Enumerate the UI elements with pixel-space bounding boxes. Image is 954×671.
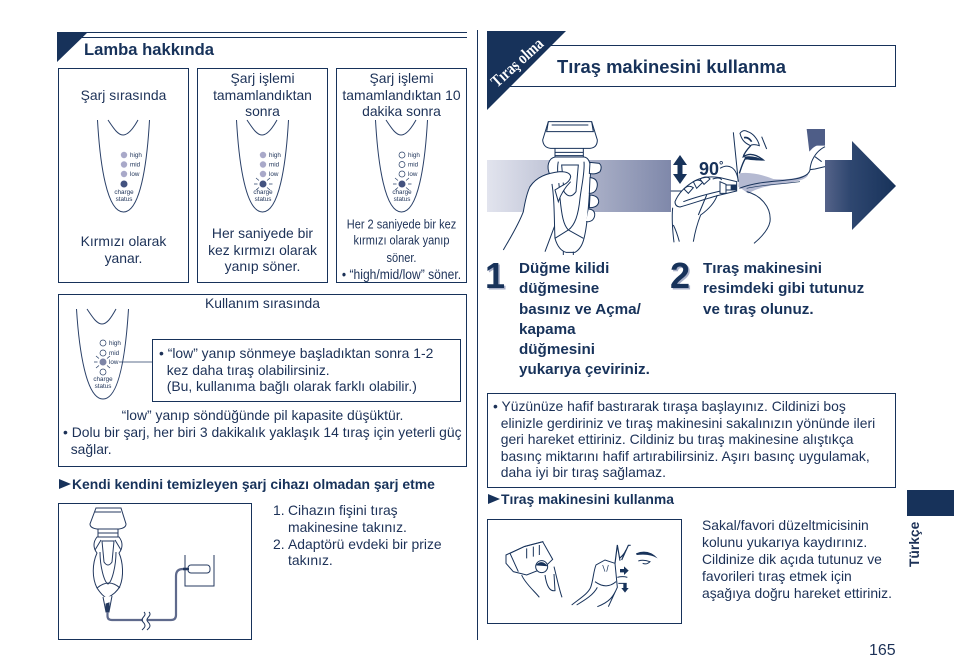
- panel: shaving tips: [487, 393, 896, 488]
- language tab: [907, 490, 954, 516]
- text: Şarj işlemi tamamlandıktan 10 dakika sonra: dakika sonra: [362, 103, 441, 119]
- illustration: shaver at 90 degrees on face: [670, 129, 826, 244]
- callout: low indicator note: [152, 339, 461, 402]
- panel: during use: [58, 294, 467, 467]
- panel: ten minutes after charging: [336, 68, 467, 283]
- icon: lamp diagram, all lit: high: [130, 152, 142, 159]
- panel: trimmer illustration: [487, 519, 682, 624]
- text: charging steps: Cihazın fişini tıraş: [288, 502, 398, 518]
- arrow: right: [825, 141, 896, 230]
- step 2 number: 2: [670, 255, 690, 296]
- text: Her saniyede bir kez: [208, 225, 317, 274]
- icon: lamp diagram, charge status blinking: low: [269, 171, 279, 178]
- text: Her 2 saniyede bir kez: söner.: [387, 251, 416, 265]
- section triangle: Tıraş olma: Tıraş olma: [487, 34, 548, 91]
- callout text: kez daha tıraş olabilirsiniz.: [167, 362, 330, 378]
- icon: lamp diagram, levels off: mid: [408, 162, 419, 168]
- text: Şarj işlemi tamamlandıktan sonra: Şarj işlemi: [230, 70, 295, 86]
- icon: lamp diagram, all lit: mid: [130, 162, 141, 168]
- icon: lamp diagram, low blinking: high: [109, 340, 121, 347]
- text: Şarj işlemi tamamlandıktan 10 dakika sonra: tamamlandıktan 10: [342, 86, 461, 102]
- page divider: [477, 30, 478, 640]
- text: Kırmızı olarak yanar: yanar.: [105, 250, 142, 266]
- tips text: basınç miktarını hafif artırabilirsiniz. Aşırı basınç uygulamak,: [501, 448, 870, 464]
- tips text: geri hareket ettiriniz. Cildiniz bu tıraş makinesine alıştıkça: [501, 431, 854, 447]
- icon: lamp diagram, charge status blinking: high: [269, 152, 281, 159]
- text: Her saniyede bir kez: yanıp söner.: [225, 258, 300, 274]
- text: Her saniyede bir kez: kez kırmızı olarak: [208, 242, 317, 258]
- text: full charge note: • Dolu bir şarj, her biri 3 dakikalık yaklaşık 14 tıraş için yeterli güç: [63, 424, 462, 440]
- text: trimmer instructions: favorileri tıraş etmek için: [702, 568, 852, 584]
- icon: lamp diagram, low blinking: status: [95, 383, 111, 390]
- text: Her 2 saniyede bir kez: kırmızı olarak yanıp: [354, 235, 449, 249]
- text: trimmer instructions: Cildinize dik açıda tutunuz ve: [702, 551, 882, 567]
- step 1 text: kapama: [519, 321, 576, 338]
- icon: lamp diagram, levels off: charge: [392, 189, 412, 196]
- step 2 text: [703, 260, 864, 318]
- icon: lamp diagram, charge status blinking: [236, 120, 289, 212]
- text: Şarj işlemi tamamlandıktan sonra: sonra: [245, 103, 280, 119]
- icon: lamp diagram, all lit: charge: [114, 189, 134, 196]
- text: charging steps: Adaptörü evdeki bir prize: [288, 536, 442, 552]
- illustration: shaver and adaptor: [90, 508, 214, 630]
- text: full charge note: [63, 424, 462, 457]
- section triangle: Tıraş olma: [487, 31, 566, 110]
- text: Her 2 saniyede bir kez: Her 2 saniyede bir kez: [347, 218, 456, 232]
- panel: after charging: [197, 68, 328, 283]
- callout text: • “low” yanıp sönmeye başladıktan sonra 1-2: [159, 345, 433, 361]
- tips text: [493, 398, 875, 480]
- callout text: (Bu, kullanıma bağlı olarak farklı olabilir.): [167, 378, 417, 394]
- header box: Tıraş makinesini kullanma: [500, 45, 896, 87]
- step 1 text: basınız ve Açma/: [519, 301, 641, 318]
- heading: Lamba hakkında: Lamba hakkında: [84, 40, 214, 59]
- icon: lamp diagram, charge status blinking: charge: [253, 189, 273, 196]
- page number: 165: [869, 642, 896, 659]
- text: full charge note: sağlar.: [71, 440, 112, 456]
- heading text: Tıraş makinesini kullanma: [557, 56, 786, 77]
- gradient band: [487, 160, 671, 212]
- icon: lamp diagram, all lit: status: [116, 196, 132, 203]
- text: Her 2 saniyede bir kez: [342, 218, 461, 283]
- text: Şarj sırasında: Şarj sırasında: [81, 87, 166, 103]
- icon: lamp diagram, low blinking: [76, 308, 152, 400]
- icon: lamp diagram, charge status blinking: mid: [269, 162, 280, 168]
- icon: lamp diagram, levels off: low: [408, 171, 418, 178]
- subheading: Tıraş makinesini kullanma: Tıraş makinesini kullanma: [501, 491, 674, 507]
- text: trimmer instructions: aşağıya doğru hareket ettiriniz.: [702, 585, 892, 601]
- text: Her saniyede bir kez: Her saniyede bir: [212, 225, 313, 241]
- text: charging steps: 2.: [273, 536, 285, 552]
- step 1 text: [519, 260, 650, 378]
- label: Türkçe: Türkçe: [907, 521, 922, 567]
- tips text: elinizle gerdiriniz ve tıraş makinesini sakalınızın yönünde ileri: [501, 414, 875, 430]
- tips text: • Yüzünüze hafif bastırarak tıraşa başlayınız. Cildinizi boş: [493, 398, 846, 414]
- text: charging steps: makinesine takınız.: [288, 519, 407, 535]
- callout text: [159, 345, 433, 394]
- text: Kırmızı olarak yanar: [81, 233, 166, 266]
- icon: lamp diagram, low blinking: mid: [109, 350, 120, 357]
- text: Şarj işlemi tamamlandıktan sonra: [213, 70, 312, 119]
- text: Kullanım sırasında: Kullanım sırasında: [205, 295, 320, 311]
- step 1 number: 1: [485, 255, 505, 296]
- icon: lamp diagram, all lit: [97, 120, 150, 212]
- icon: lamp diagram, charge status blinking: status: [255, 196, 271, 203]
- text: charging steps: 1.: [273, 502, 285, 518]
- text: low capacity note: “low” yanıp söndüğünde pil kapasite düşüktür.: [122, 407, 403, 423]
- text: trimmer instructions: [702, 517, 892, 601]
- text: Şarj işlemi tamamlandıktan sonra: tamamlandıktan: [213, 86, 312, 102]
- step 2 text: Tıraş makinesini: [703, 260, 822, 277]
- step 1 text: Düğme kilidi: [519, 260, 609, 277]
- icon: up-down arrow: [673, 155, 687, 184]
- tips text: daha iyi bir tıraş sağlamaz.: [501, 464, 666, 480]
- step 2 text: ve tıraş olunuz.: [703, 301, 814, 318]
- text: Şarj işlemi tamamlandıktan 10 dakika sonra: Şarj işlemi: [369, 70, 434, 86]
- step 2 text: resimdeki gibi tutunuz: [703, 280, 864, 297]
- text: trimmer instructions: kolunu yukarıya kaydırınız.: [702, 534, 867, 550]
- label: 90 degrees: 90°: [699, 159, 723, 179]
- text: charging steps: takınız.: [288, 552, 333, 568]
- step 1 text: düğmesine: [519, 280, 599, 297]
- subheading: charging without cleaner: Kendi kendini temizleyen şarj cihazı olmadan şarj etme: [72, 476, 435, 492]
- text: Kırmızı olarak yanar: Kırmızı olarak: [81, 233, 166, 249]
- icon: lamp diagram, low blinking: low: [109, 359, 119, 366]
- panel: charging: [58, 68, 189, 283]
- panel: shaver plugged into adaptor: [58, 503, 252, 640]
- left header triangle: [57, 33, 87, 62]
- icon: lamp diagram, levels off: status: [394, 196, 410, 203]
- text: Şarj işlemi tamamlandıktan 10 dakika sonra: [342, 70, 461, 119]
- text: Her 2 saniyede bir kez: • “high/mid/low” söner.: [342, 267, 461, 283]
- text: charging steps: [273, 502, 442, 568]
- step 1 text: yukarıya çeviriniz.: [519, 361, 650, 378]
- icon: lamp diagram, low blinking: charge: [93, 376, 113, 383]
- illustration: hand holding shaver: [502, 121, 602, 255]
- icon: lamp diagram, levels off: [375, 120, 428, 212]
- text: trimmer instructions: Sakal/favori düzeltmicisinin: [702, 517, 869, 533]
- illustration: trimmer use: [506, 541, 658, 608]
- icon: lamp diagram, all lit: low: [130, 171, 140, 178]
- left section header rules: [57, 32, 467, 38]
- step 1 text: düğmesini: [519, 341, 595, 358]
- icon: lamp diagram, levels off: high: [408, 152, 420, 159]
